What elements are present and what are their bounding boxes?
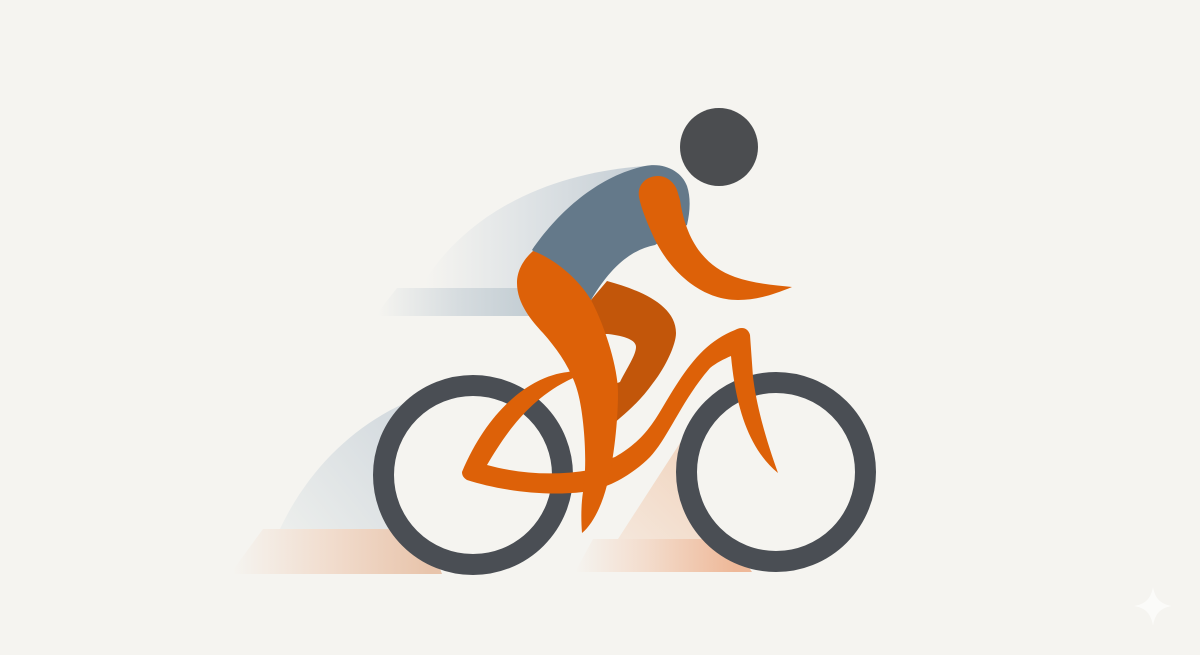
rear wheel: [384, 386, 562, 564]
head: [680, 108, 758, 186]
motion trail: horizontal band: [375, 288, 530, 316]
bicycle frame: [462, 328, 778, 494]
floor shadow: rear wheel: [230, 529, 442, 574]
icon: sparkle watermark: [1134, 587, 1172, 626]
motion trail: torso: [420, 166, 645, 295]
front wheel: [686, 382, 866, 562]
motion trail: front wheel triangle: [618, 440, 720, 539]
torso: [532, 165, 690, 300]
motion trail: rear wheel arc: [280, 398, 440, 529]
arm: [639, 176, 792, 300]
floor shadow: front wheel: [575, 539, 752, 572]
back leg: [591, 281, 676, 425]
front leg: [517, 251, 618, 533]
